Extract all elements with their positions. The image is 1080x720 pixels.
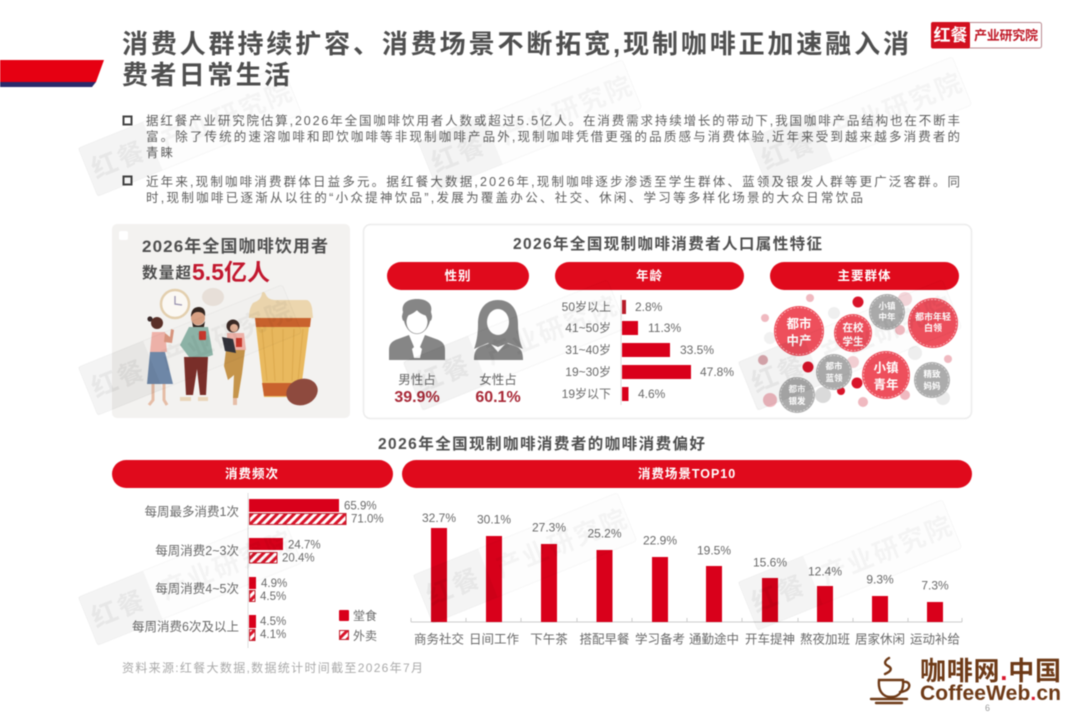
bubble: 都市年轻白领 [908, 298, 958, 348]
pill: age [555, 262, 744, 290]
watermarks: 产业研究院 [492, 503, 633, 583]
watermarks: 产业研究院 [157, 295, 298, 375]
bar: 下午茶: 下午茶 [530, 632, 568, 646]
bar: 居家休闲 [855, 572, 905, 646]
row: once a week: 65.9% [344, 500, 377, 512]
bubble: 都市银发: 银发 [788, 396, 806, 406]
male share: 39.9% [394, 389, 440, 406]
bullet paragraph 1: 据红餐产业研究院估算,2026年全国咖啡饮用者人数或超过5.5亿人。在消费需求持续增长的带动下,我国咖啡产品结构也在不断丰 [146, 113, 960, 128]
chart: top 10 scenes [411, 511, 962, 646]
age row: 19-30: 19~30岁 [565, 364, 611, 379]
bar: 居家休闲: 9.3% [866, 572, 894, 586]
watermarks: 产业研究院 [817, 290, 958, 370]
bubble: 都市年轻白领: 白领 [924, 322, 942, 333]
panel: demographics [364, 224, 972, 418]
row: 4-5 times: 4.5% [260, 591, 286, 603]
age row: 31-40 [565, 342, 714, 357]
bar: 日间工作: 日间工作 [469, 632, 519, 646]
pill: age: 年龄 [636, 268, 663, 283]
age row: 50+ [562, 299, 663, 314]
bar: 商务社交: 32.7% [422, 511, 456, 525]
row: 2-3 times [155, 538, 321, 564]
bar: 下午茶 [530, 520, 568, 646]
pill: frequency: 消费频次 [225, 466, 279, 481]
illustration: man with coffee [180, 307, 213, 401]
icon: coffee cup [871, 658, 909, 703]
watermarks: 红餐 [747, 569, 810, 618]
bar: 搭配早餐 [579, 526, 630, 646]
watermarks: 产业研究院 [157, 525, 298, 605]
bubble: 小镇中年: 中年 [878, 312, 896, 322]
illustration: woman with tablet [222, 320, 246, 405]
bubble: 精致妈妈 [914, 362, 950, 398]
bar: 搭配早餐: 搭配早餐 [579, 632, 630, 646]
watermarks: 红餐 [422, 562, 485, 611]
illustration: woman with skirt [147, 316, 174, 405]
age row: 41-50 [565, 320, 681, 335]
illustration: takeaway cup [249, 292, 313, 397]
age row: 31-40: 33.5% [680, 343, 714, 357]
watermarks: 红餐 [87, 135, 150, 184]
bar: 搭配早餐: 25.2% [587, 526, 622, 540]
panel heading: 5.5亿人 [192, 259, 270, 285]
bullet paragraph 2: 近年来,现制咖啡消费群体日益多元。据红餐大数据,2026年,现制咖啡逐步渗透至学生群体、蓝领及银发人群等更广泛客群。同 [146, 174, 960, 189]
wordmark en: CoffeeWeb.cn [920, 682, 1061, 705]
age row: 50+: 2.8% [635, 300, 663, 314]
bubble: 都市蓝领: 都市 [825, 361, 843, 371]
age row: 50+: 50岁以上 [562, 299, 611, 314]
title [122, 29, 909, 90]
bubble: 都市银发: 都市 [788, 384, 806, 394]
bubble: 都市蓝领: 蓝领 [825, 373, 843, 383]
female share: 60.1% [475, 389, 521, 406]
watermarks: 红餐 [757, 126, 820, 175]
bar: 居家休闲: 居家休闲 [855, 632, 905, 646]
legend: 堂食 [353, 608, 377, 623]
row: 4-5 times: 每周消费4~5次 [155, 581, 239, 596]
row: 6+ times: 每周消费6次及以上 [132, 619, 239, 634]
bubble: 小镇青年 [862, 351, 910, 399]
bubble: 都市蓝领 [816, 354, 852, 390]
panel: coffee drinkers [112, 224, 350, 418]
pill: main groups [770, 262, 959, 290]
bar: 商务社交 [414, 511, 464, 646]
title: 费者日常生活 [122, 60, 290, 90]
bar: 开车提神: 15.6% [753, 556, 787, 570]
row: 4-5 times: 4.9% [261, 578, 287, 590]
panel heading: 2026年全国现制咖啡消费者人口属性特征 [513, 234, 822, 253]
bar: 学习备考: 22.9% [643, 534, 677, 548]
age row: 41-50: 11.3% [648, 321, 681, 335]
chart: consumption frequency [132, 493, 384, 648]
row: once a week [145, 499, 384, 526]
bar: 通勤途中: 19.5% [697, 544, 731, 558]
row: once a week: 71.0% [351, 514, 384, 526]
header ribbon [0, 60, 104, 87]
pill: gender [387, 262, 529, 290]
age row: 41-50: 41~50岁 [565, 320, 611, 335]
bar: 开车提神: 开车提神 [745, 632, 795, 646]
bubble: 小镇中年 [869, 294, 905, 330]
legend: 外卖 [353, 629, 377, 643]
CoffeeWeb logo [871, 656, 1061, 705]
watermarks: 红餐 [87, 354, 150, 403]
row: 2-3 times: 20.4% [282, 552, 315, 564]
watermarks: 红餐 [412, 349, 475, 398]
bar: 熬夜加班: 熬夜加班 [800, 632, 850, 646]
watermarks [78, 57, 972, 645]
icon: coffee bean [283, 374, 321, 410]
pill: main groups: 主要群体 [837, 268, 892, 283]
group bubble cloud [758, 292, 958, 413]
female share: 女性占 [479, 372, 517, 387]
age row: 31-40: 31~40岁 [565, 342, 611, 357]
bubble: 小镇青年: 青年 [873, 377, 899, 392]
bar: 熬夜加班 [800, 564, 850, 646]
row: 2-3 times: 每周消费2~3次 [155, 543, 239, 558]
bubble: 精致妈妈: 精致 [923, 369, 941, 379]
wordmark cn: 咖啡网.中国 [920, 656, 1061, 686]
icon: wall clock [161, 290, 189, 318]
bar: 日间工作: 30.1% [477, 512, 511, 526]
watermarks: 红餐 [747, 349, 810, 398]
bullet paragraph 2 [124, 174, 960, 205]
icon: speech bubble [202, 288, 224, 306]
pill: frequency [112, 460, 393, 488]
age row: under 19: 4.6% [638, 387, 666, 401]
bubble: 都市年轻白领: 都市年轻 [915, 311, 951, 322]
pill: scenes top 10 [402, 460, 972, 488]
female share [475, 372, 521, 406]
bar: 熬夜加班: 12.4% [808, 564, 842, 578]
bar: 运动补给 [910, 578, 960, 646]
bar: 通勤途中: 通勤途中 [689, 632, 739, 646]
bar: 通勤途中 [689, 544, 739, 646]
bubble: 都市银发 [779, 377, 815, 413]
watermarks: 红餐 [87, 584, 150, 633]
title: 消费人群持续扩容、消费场景不断拓宽,现制咖啡正加速融入消 [122, 29, 909, 59]
age row: 19-30 [565, 364, 734, 379]
bullet paragraph 1 [124, 113, 960, 160]
age bar chart [562, 295, 734, 405]
bar: 运动补给: 7.3% [921, 578, 949, 592]
bar: 学习备考 [635, 534, 685, 646]
pill: scenes top 10: 消费场景TOP10 [638, 466, 736, 481]
bullet paragraph 1: 富。除了传统的速溶咖啡和即饮咖啡等非现制咖啡产品外,现制咖啡凭借更强的品质感与消费体验,近年来受到越来越多消费者的 [146, 129, 960, 144]
bubble: 在校学生 [834, 314, 872, 352]
page number: 6 [985, 703, 990, 713]
bubble: 精致妈妈: 妈妈 [923, 381, 941, 391]
row: 2-3 times: 24.7% [288, 540, 321, 552]
brand logo: 红餐产业研究院: 红餐 [934, 26, 968, 45]
section heading: preferences: 2026年全国现制咖啡消费者的咖啡消费偏好 [378, 434, 705, 453]
bullet paragraph 1: 青睐 [146, 146, 173, 160]
row: 4-5 times [155, 577, 287, 603]
row: 6+ times: 4.1% [260, 629, 286, 641]
watermarks: 红餐 [427, 129, 490, 178]
age row: 19-30: 47.8% [700, 365, 734, 379]
bar: 日间工作 [469, 512, 519, 646]
legend [339, 608, 377, 643]
bubble: 小镇中年: 小镇 [878, 301, 896, 311]
bar: 下午茶: 27.3% [532, 520, 566, 534]
age row: under 19 [562, 386, 666, 401]
bubble: 小镇青年: 小镇 [873, 360, 899, 375]
row: 6+ times: 4.5% [260, 616, 286, 628]
brand logo: 红餐产业研究院 [931, 22, 1042, 48]
panel heading: 数量超 [142, 264, 191, 282]
bubble: 在校学生: 学生 [842, 335, 864, 348]
row: 6+ times [132, 615, 286, 641]
source note: 资料来源:红餐大数据,数据统计时间截至2026年7月 [122, 660, 423, 675]
watermarks: 产业研究院 [817, 510, 958, 590]
watermarks: 产业研究院 [497, 70, 638, 150]
brand logo: 红餐产业研究院: 产业研究院 [974, 28, 1038, 43]
age row: under 19: 19岁以下 [562, 386, 611, 401]
watermarks: 产业研究院 [827, 67, 968, 147]
panel heading: 2026年全国咖啡饮用者 [142, 236, 328, 256]
bullet paragraph 2: 时,现制咖啡已逐渐从以往的“小众提神饮品”,发展为覆盖办公、社交、休闲、学习等多样化场景的大众日常饮品 [146, 190, 863, 205]
male share: 男性占 [398, 372, 436, 387]
bar: 运动补给: 运动补给 [910, 632, 960, 646]
panel heading [142, 236, 328, 285]
watermarks: 产业研究院 [157, 76, 298, 156]
watermarks: 产业研究院 [482, 290, 623, 370]
bar: 开车提神 [745, 556, 795, 646]
pill: gender: 性别 [444, 268, 472, 283]
bar: 学习备考: 学习备考 [635, 632, 685, 646]
icon: male [389, 299, 445, 360]
row: once a week: 每周最多消费1次 [145, 504, 239, 519]
bubble: 都市中产: 中产 [786, 333, 812, 348]
bar: 商务社交: 商务社交 [414, 632, 464, 646]
male share [394, 372, 440, 406]
bubble: 都市中产: 都市 [786, 316, 812, 331]
icon: female [474, 300, 523, 360]
bubble: 在校学生: 在校 [842, 321, 864, 334]
bubble: 都市中产 [774, 306, 824, 356]
